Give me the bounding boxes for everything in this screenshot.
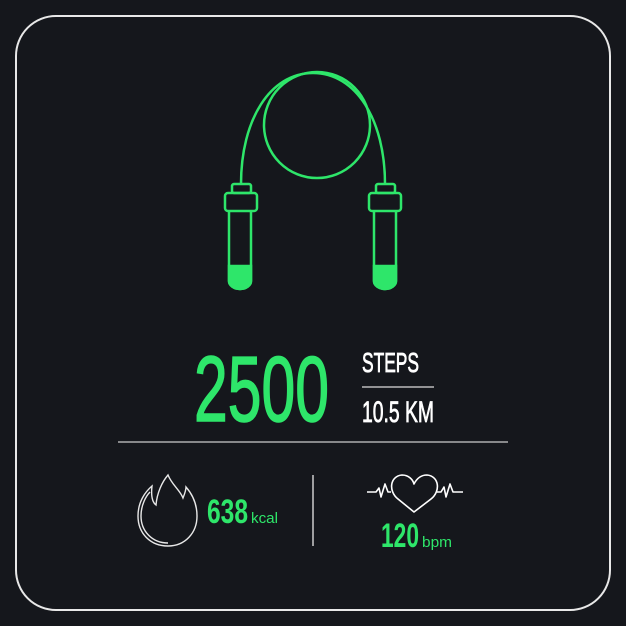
icon: flame: [138, 475, 197, 546]
stat: heart rate: 120: [381, 517, 419, 555]
label: 10.5 KM: 10.5 KM: [362, 396, 434, 429]
stat: calories: 638: [207, 493, 248, 531]
icon: heart with pulse: [367, 475, 463, 512]
big number: 2500 steps: 2500: [194, 337, 329, 441]
label: STEPS: STEPS: [362, 347, 419, 378]
stat: heart rate: bpm: [422, 534, 452, 551]
stat: calories: kcal: [251, 510, 278, 527]
icon: jump rope: [225, 72, 401, 289]
